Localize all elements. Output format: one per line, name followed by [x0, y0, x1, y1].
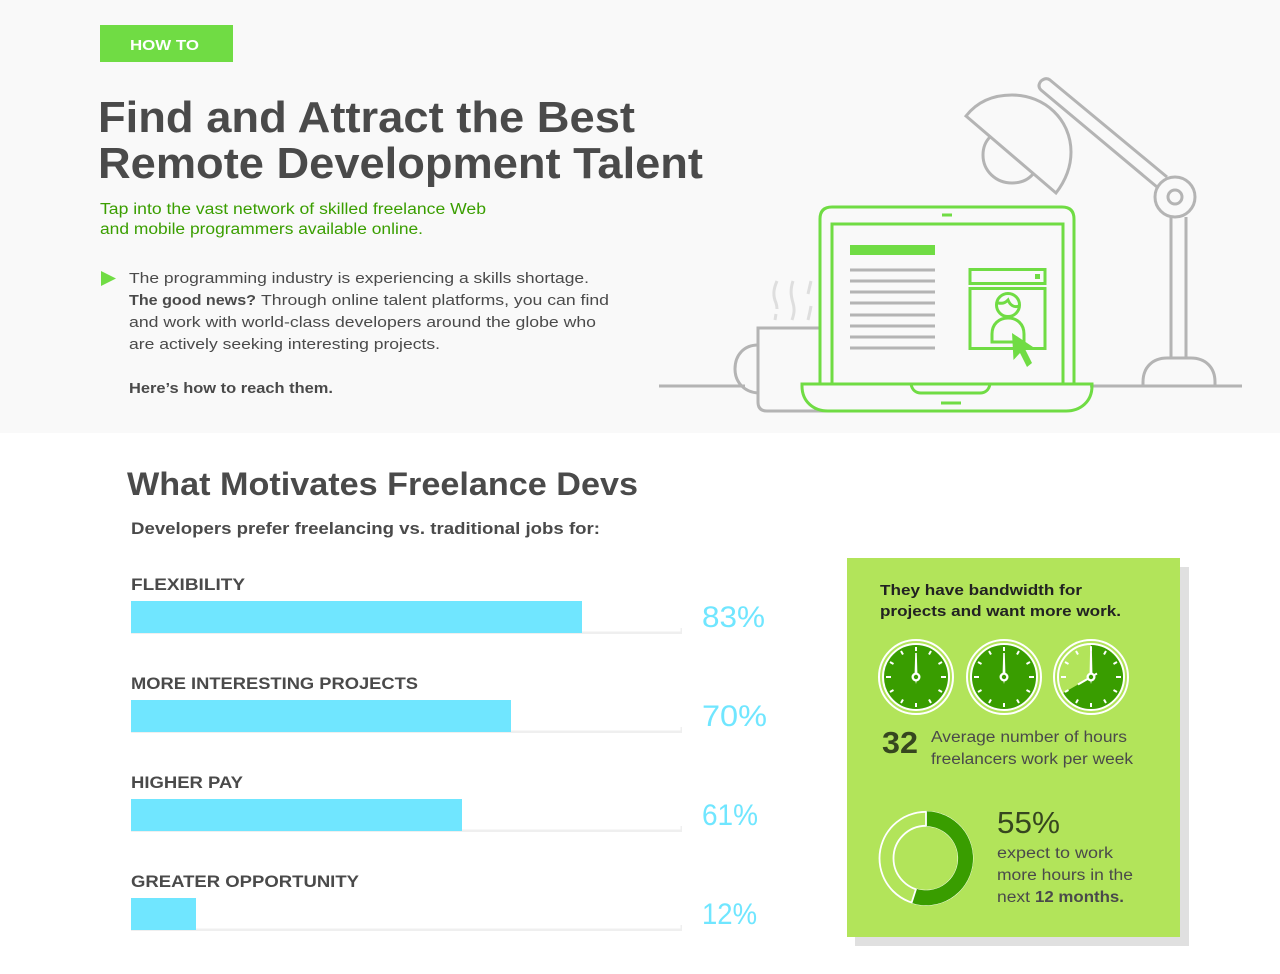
stat: 32 hours: Average number of hours — [931, 729, 1127, 746]
panel heading: projects and want more work. — [880, 603, 1121, 620]
tag: how to — [100, 25, 233, 62]
intro text block: Through online talent platforms, you can find — [261, 292, 609, 309]
icon: laptop — [802, 207, 1092, 411]
icon: coffee mug — [735, 281, 835, 411]
panel heading — [880, 582, 1121, 620]
bar: higher pay — [131, 773, 758, 832]
bar: more interesting projects: 70% — [702, 700, 767, 733]
profile window — [970, 270, 1045, 367]
bar: greater opportunity: 12% — [702, 898, 757, 931]
stat: 55% more hours: expect to work — [997, 845, 1113, 862]
title: Find and Attract the Best — [98, 93, 635, 142]
panel: bandwidth stats — [847, 558, 1189, 946]
stat: 32 hours: 32 — [882, 725, 918, 760]
bar: higher pay: HIGHER PAY — [131, 773, 244, 792]
panel heading: They have bandwidth for — [880, 582, 1082, 599]
bar: greater opportunity: GREATER OPPORTUNITY — [131, 872, 360, 891]
heading: what motivates freelance devs: What Motivates Freelance Devs — [127, 466, 638, 502]
intro text block: and work with world-class developers around the globe who — [129, 314, 596, 331]
intro text block: Here’s how to reach them. — [129, 380, 333, 397]
stat: 55% more hours: 12 months. — [1035, 889, 1124, 906]
icon: clock three, partial — [1054, 640, 1128, 714]
donut chart: 55% — [880, 811, 973, 905]
subtitle: and mobile programmers available online. — [100, 221, 423, 238]
bar: more interesting projects: MORE INTERESTING PROJECTS — [131, 674, 418, 693]
illustration: desk with laptop, mug and lamp — [659, 79, 1242, 411]
tag: how to: HOW TO — [130, 37, 199, 54]
stat: 32 hours — [882, 725, 1133, 768]
title — [98, 93, 703, 188]
bar: flexibility: FLEXIBILITY — [131, 575, 246, 594]
bar chart: motivations — [131, 575, 767, 931]
stat: 55% more hours — [997, 805, 1133, 906]
bar: more interesting projects — [131, 674, 767, 733]
stat: 55% more hours: more hours in the — [997, 867, 1133, 884]
intro text block — [129, 270, 609, 397]
icon: desk lamp — [966, 79, 1215, 386]
bar: higher pay: 61% — [702, 799, 758, 832]
stat: 32 hours: freelancers work per week — [931, 751, 1133, 768]
bar: flexibility: 83% — [702, 601, 765, 634]
intro text block: are actively seeking interesting projects. — [129, 336, 440, 353]
subtitle — [100, 201, 486, 238]
title: Remote Development Talent — [98, 139, 703, 188]
icon: clock one — [879, 640, 953, 714]
screen text lines — [850, 245, 935, 348]
stat: 55% more hours: next — [997, 889, 1031, 906]
bar: flexibility — [131, 575, 765, 634]
intro text block: The good news? — [129, 292, 256, 309]
desk line — [659, 384, 1242, 388]
bar: greater opportunity — [131, 872, 757, 931]
stat: 55% more hours: 55% — [997, 805, 1060, 840]
icon: bullet triangle — [101, 271, 116, 286]
subtitle: Tap into the vast network of skilled freelance Web — [100, 201, 486, 218]
panel: hero header — [0, 0, 1280, 433]
intro text block: The programming industry is experiencing a skills shortage. — [129, 270, 589, 287]
icon: clock two — [967, 640, 1041, 714]
subheading: Developers prefer freelancing vs. traditional jobs for: — [131, 519, 600, 538]
